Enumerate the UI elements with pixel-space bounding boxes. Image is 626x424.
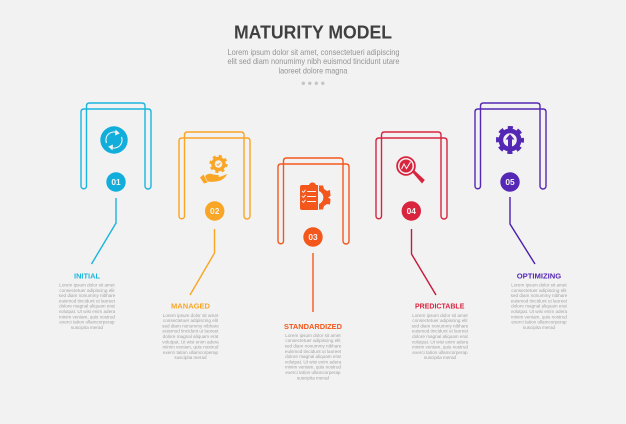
- body text 5: Lorem ipsum dolor sit amet: [511, 282, 567, 288]
- body text 4: dolore magnal aliquam erat: [412, 334, 469, 339]
- title: MATURITY MODEL: [234, 22, 392, 42]
- body text 2: volutpat. Ut wisi enim adera: [162, 339, 219, 344]
- frame 5: [475, 103, 546, 189]
- header dots: [302, 82, 324, 85]
- body text 1: euismod tincidunt ut laoreet: [59, 298, 116, 303]
- connector 4: [412, 229, 436, 295]
- number badge 04: [402, 201, 421, 221]
- body text 5: sed diam nonummy nibhare: [511, 293, 568, 298]
- icon: magnifier with chart: [397, 157, 425, 184]
- frame 2: [179, 132, 250, 219]
- body text 4: [412, 313, 469, 360]
- connector 5: [510, 197, 535, 264]
- frame 1: [81, 103, 151, 189]
- frame 4: [376, 132, 447, 219]
- step 5: optimizing: [475, 103, 568, 330]
- subtitle text block: [228, 48, 400, 76]
- number badge 01: 01: [111, 177, 121, 187]
- body text 2: sed diam nonummy nibhare: [162, 323, 219, 328]
- body text 4: sed diam nonummy nibhare: [412, 323, 469, 328]
- body text 3: [285, 333, 342, 380]
- number badge 05: 05: [505, 177, 515, 187]
- connector 1: [92, 198, 116, 264]
- step 3: standardized: [278, 158, 349, 380]
- body text 1: [59, 282, 116, 330]
- body text 5: consectetuer adipiscing elit: [511, 288, 567, 293]
- body text 3: dolore magnal aliquam erat: [285, 354, 342, 359]
- body text 5: [511, 282, 568, 330]
- body text 1: exerci tation ullamcorperap: [59, 320, 115, 325]
- body text 1: suscipita merad: [71, 325, 104, 330]
- body text 3: exerci tation ullamcorperap: [285, 370, 341, 375]
- subtitle text block: Lorem ipsum dolor sit amet, consectetueri adipiscing: [228, 48, 400, 57]
- body text 4: Lorem ipsum dolor sit amet: [412, 313, 468, 318]
- body text 5: exerci tation ullamcorperap: [511, 320, 567, 325]
- icon: gear with up arrow: [498, 128, 522, 152]
- connector 2: [190, 229, 214, 295]
- body text 3: suscipita merad: [297, 375, 330, 380]
- number badge 02: [205, 201, 224, 221]
- label: standardized: STANDARDIZED: [284, 322, 342, 331]
- body text 5: dolore magnal aliquam erat: [511, 304, 568, 309]
- body text 3: euismod tincidunt ut laoreet: [285, 349, 342, 354]
- step 1: initial: [59, 103, 151, 330]
- body text 1: sed diam nonummy nibhare: [59, 293, 116, 298]
- body text 2: dolore magnal aliquam erat: [163, 334, 219, 339]
- body text 3: sed diam nonummy nibhare: [285, 344, 342, 348]
- body text 1: Lorem ipsum dolor sit amet: [59, 282, 115, 288]
- body text 4: exerci tation ullamcorperap: [412, 350, 468, 355]
- body text 3: volutpat. Ut wisi enim adera: [285, 359, 342, 364]
- label: initial: INITIAL: [74, 272, 101, 280]
- body text 2: consectetuer adipiscing elit: [163, 318, 219, 323]
- body text 5: euismod tincidunt ut laoreet: [511, 298, 568, 303]
- frame 3: [278, 158, 349, 244]
- body text 3: consectetuer adipiscing elit: [285, 338, 341, 343]
- body text 4: volutpat. Ut wisi enim adera: [412, 339, 469, 344]
- body text 2: suscipita merad: [174, 355, 207, 360]
- body text 2: minim veniam, quis nostrud: [163, 345, 219, 350]
- body text 4: euismod tincidunt ut laoreet: [412, 329, 469, 334]
- body text 2: euismod tincidunt ut laoreet: [162, 329, 219, 334]
- body text 3: minim veniam, quis nostrud: [285, 365, 341, 370]
- label: predictable: PREDICTABLE: [415, 302, 465, 311]
- body text 1: volutpat. Ut wisi enim adera: [59, 309, 116, 314]
- body text 1: consectetuer adipiscing elit: [59, 288, 115, 293]
- subtitle text block: elit sed diam nonumimy nibh euismod tincidunt utare: [228, 57, 400, 66]
- icon: clipboard with gear: [300, 182, 330, 210]
- step 2: managed: [162, 132, 250, 360]
- body text 5: suscipita merad: [523, 325, 556, 330]
- number badge 03: [303, 227, 323, 247]
- body text 4: suscipita merad: [424, 355, 457, 360]
- number badge 05: [500, 172, 520, 192]
- body text 5: minim veniam, quis nostrud: [511, 314, 567, 319]
- body text 1: minim veniam, quis nostrud: [59, 314, 115, 319]
- label: managed: MANAGED: [171, 302, 210, 311]
- number badge 04: 04: [407, 206, 416, 216]
- number badge 03: 03: [308, 232, 318, 242]
- subtitle text block: laoreet dolore magna: [278, 66, 348, 76]
- body text 2: exerci tation ullamcorperap: [163, 350, 219, 355]
- body text 1: dolore magnal aliquam erat: [59, 304, 116, 309]
- connector 3: [312, 253, 314, 312]
- number badge 01: [106, 172, 126, 192]
- body text 5: volutpat. Ut wisi enim adera: [511, 309, 568, 314]
- label: optimizing: OPTIMIZING: [517, 272, 562, 280]
- body text 2: [162, 313, 219, 360]
- icon: cycle arrows: [100, 126, 128, 154]
- body text 4: minim veniam, quis nostrud: [412, 345, 468, 350]
- icon: hand with gear: [200, 156, 227, 184]
- step 4: predictable: [376, 132, 469, 360]
- number badge 02: 02: [210, 206, 220, 216]
- body text 4: consectetuer adipiscing elit: [412, 318, 468, 323]
- body text 3: Lorem ipsum dolor sit amet: [285, 333, 341, 338]
- body text 2: Lorem ipsum dolor sit amet: [163, 313, 219, 318]
